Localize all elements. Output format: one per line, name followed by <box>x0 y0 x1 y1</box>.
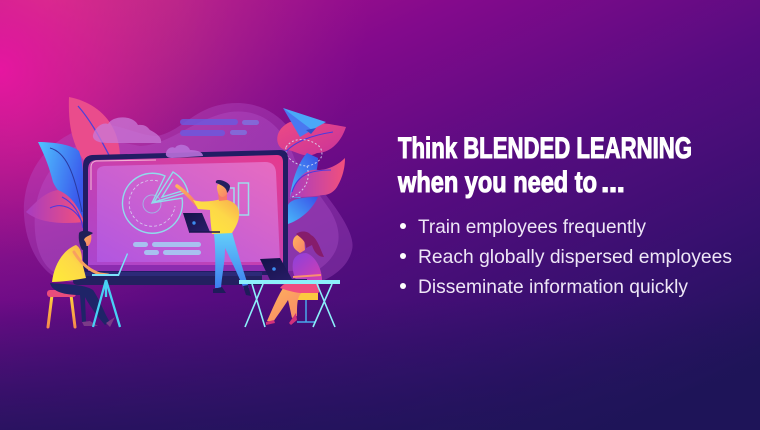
screen text bars <box>133 242 201 255</box>
paper plane <box>283 108 326 137</box>
skirt <box>280 283 320 293</box>
arm <box>293 275 321 277</box>
seated man with laptop <box>47 231 128 327</box>
leaf: left blue <box>38 142 84 220</box>
table <box>239 280 340 327</box>
bullet list <box>400 216 732 298</box>
trousers <box>50 283 110 325</box>
leaves: right cluster <box>277 122 346 224</box>
torso <box>52 245 86 282</box>
cloud: small <box>166 145 203 158</box>
large screen <box>73 150 288 285</box>
heading: ... <box>601 166 625 199</box>
background blob <box>24 103 353 285</box>
laptop <box>260 258 307 280</box>
bar chart outlines <box>224 183 248 218</box>
bullet: train employees: Train employees frequently <box>418 216 646 238</box>
desk trestle <box>93 280 120 327</box>
stool <box>47 290 76 327</box>
monitor body <box>83 150 288 275</box>
monitor base <box>73 273 262 285</box>
head and hair <box>293 234 305 253</box>
laptop <box>92 253 128 276</box>
bullet: disseminate information: Disseminate information quickly <box>418 276 688 298</box>
cloud: large <box>93 117 161 143</box>
pie chart <box>122 172 188 233</box>
screen <box>88 155 283 269</box>
screen inner panel <box>97 162 280 262</box>
seated woman with laptop <box>239 231 340 327</box>
head and beard <box>83 234 91 246</box>
leaf: top left pink <box>69 97 120 162</box>
illustration: blended learning team at a large screen <box>24 97 353 327</box>
legs <box>267 284 318 322</box>
floating text bars <box>180 119 259 136</box>
bullet: reach employees: Reach globally dispersed employees <box>418 246 732 268</box>
heading: when you need to <box>397 166 597 199</box>
stool <box>295 293 318 322</box>
presenter figure <box>177 180 251 296</box>
heading <box>397 132 692 199</box>
highlight stroke <box>91 160 156 190</box>
blouse <box>293 253 322 280</box>
leaf: left lower pink <box>26 190 84 228</box>
